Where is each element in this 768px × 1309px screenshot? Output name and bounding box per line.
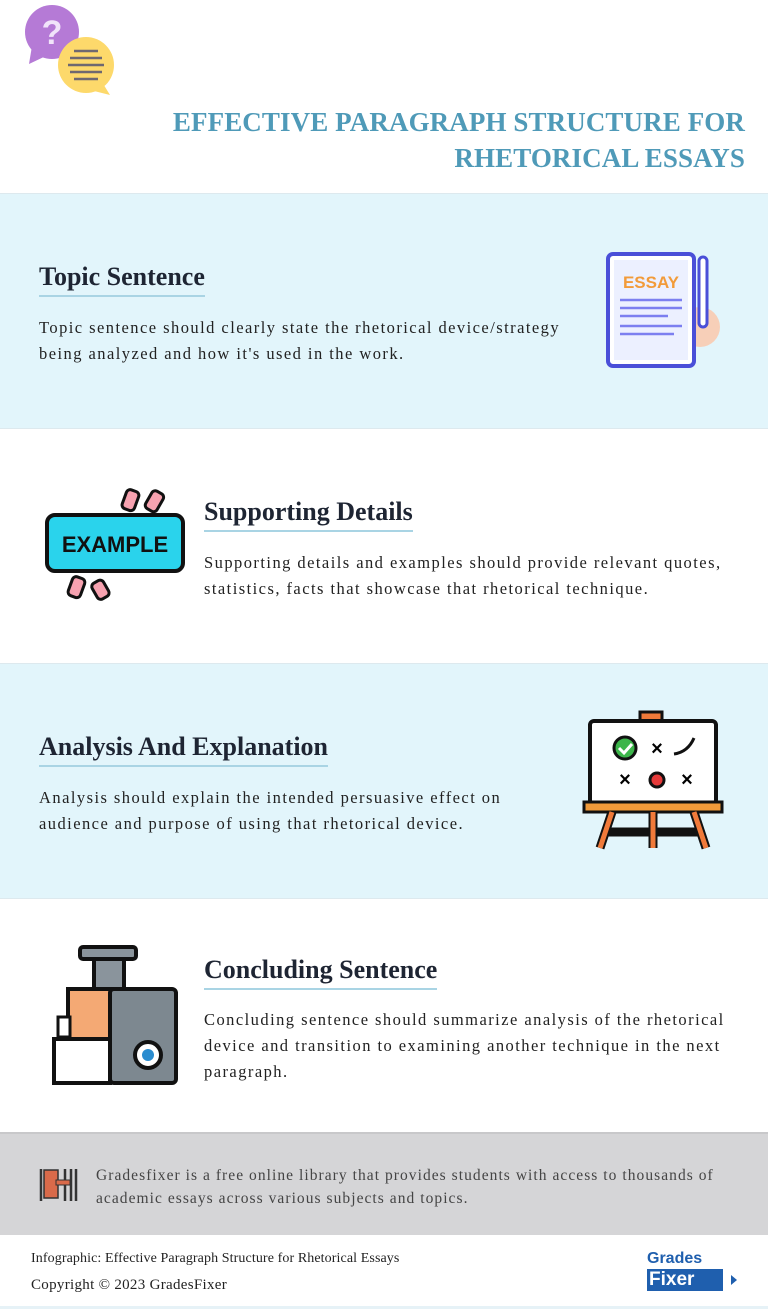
text: supporting details: Supporting details and examples should provide relevant quotes, xyxy=(204,553,722,572)
text: about xyxy=(96,1167,714,1207)
icon: strategy easel xyxy=(582,710,724,850)
text: supporting details xyxy=(204,553,722,598)
icon: juicer xyxy=(52,945,178,1085)
text: concluding sentence: paragraph. xyxy=(204,1062,289,1081)
panel: supporting details xyxy=(0,428,768,663)
text: topic sentence: Topic sentence should clearly state the rhetorical device/strategy xyxy=(39,318,560,337)
icon: example sign xyxy=(45,488,185,601)
logo: gradesfixer xyxy=(647,1250,737,1291)
text: topic sentence: being analyzed and how it's used in the work. xyxy=(39,344,405,363)
text: concluding sentence: Concluding sentence should summarize analysis of the rhetorical xyxy=(204,1010,725,1029)
footer: credits xyxy=(31,1251,399,1293)
icon: strategy easel: × xyxy=(681,769,693,791)
icon: strategy easel: × xyxy=(651,738,663,760)
text: supporting details: statistics, facts that showcase that rhetorical technique. xyxy=(204,579,649,598)
icon: gavel xyxy=(40,1169,78,1201)
logo: gradesfixer: Fixer xyxy=(649,1269,694,1290)
text: topic sentence xyxy=(39,318,560,363)
title: EFFECTIVE PARAGRAPH STRUCTURE FOR xyxy=(173,107,745,137)
panel: analysis and explanation xyxy=(0,663,768,898)
heading: analysis: Analysis And Explanation xyxy=(39,732,328,761)
text: about: Gradesfixer is a free online library that provides students with access to thousands of xyxy=(96,1167,714,1184)
heading: concluding sentence: Concluding Sentence xyxy=(204,955,437,984)
heading: supporting details: Supporting Details xyxy=(204,497,413,526)
title: RHETORICAL ESSAYS xyxy=(454,143,745,173)
text: analysis: audience and purpose of using that rhetorical device. xyxy=(39,814,464,833)
footer: credits: Copyright © 2023 GradesFixer xyxy=(31,1277,227,1293)
icon: strategy easel: × xyxy=(619,769,631,791)
panel: about gradesfixer xyxy=(0,1132,768,1235)
text: analysis: Analysis should explain the intended persuasive effect on xyxy=(39,788,501,807)
text: about: academic essays across various subjects and topics. xyxy=(96,1190,468,1207)
icon: speech bubbles xyxy=(25,5,114,95)
text: concluding sentence xyxy=(204,1010,725,1081)
panel: concluding sentence xyxy=(0,898,768,1132)
panel: topic sentence xyxy=(0,193,768,428)
footer: credits: Infographic: Effective Paragraph Structure for Rhetorical Essays xyxy=(31,1251,399,1266)
text: concluding sentence: device and transition to examining another technique in the next xyxy=(204,1036,721,1055)
icon: essay clipboard xyxy=(606,252,720,368)
logo: gradesfixer: Grades xyxy=(647,1250,702,1267)
heading: topic sentence: Topic Sentence xyxy=(39,262,205,291)
text: analysis xyxy=(39,788,501,833)
title xyxy=(173,107,746,173)
icon: example sign: EXAMPLE xyxy=(62,532,168,557)
icon: essay clipboard: ESSAY xyxy=(623,273,680,292)
icon: speech bubbles: ? xyxy=(42,14,62,52)
